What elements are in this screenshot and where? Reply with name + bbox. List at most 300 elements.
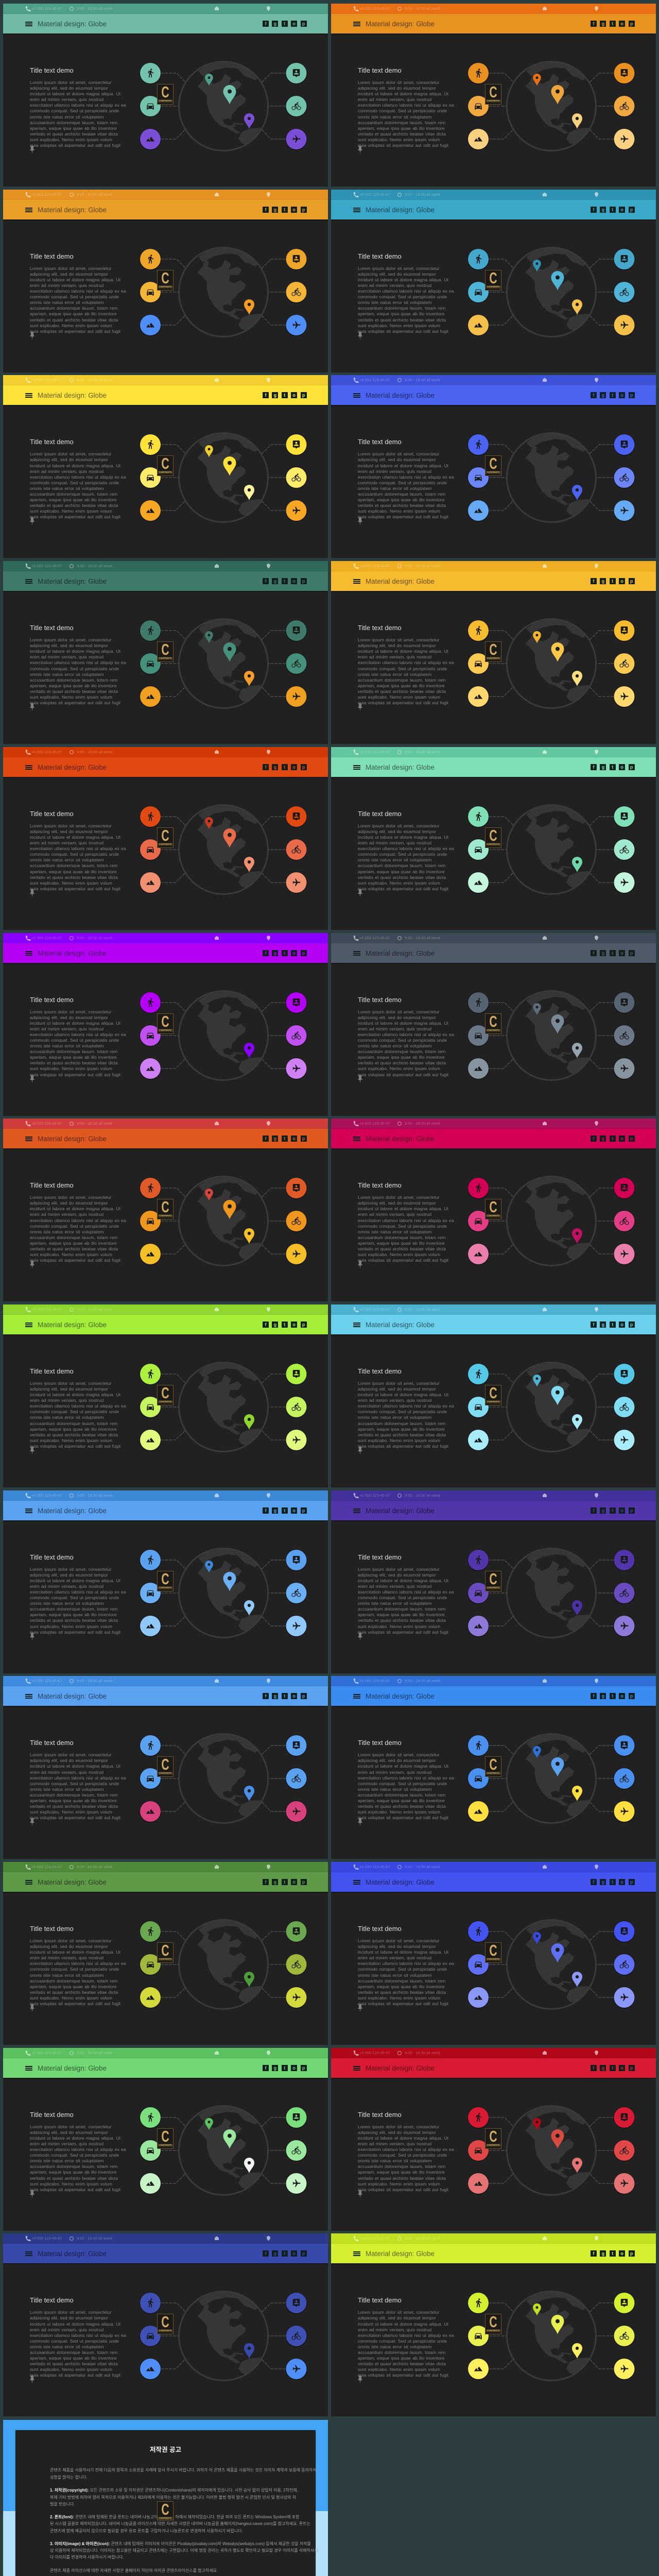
body text: veritatis et quasi archicto beatae vitae dicta: [358, 503, 446, 508]
top info bar: [3, 1118, 328, 1129]
body text: enim ad minim veniam, quis nostrud: [358, 840, 431, 845]
watermark badge: CONTENTS: [159, 99, 171, 102]
header bar: f: [265, 393, 267, 398]
header bar: t: [284, 765, 285, 770]
body text: omnis iste natus error sit voluptatem: [30, 1415, 104, 1420]
body text: sunt explicabo. Nemo enim ipsam volum: [30, 2367, 112, 2372]
panel: slide 18 deep purple: [331, 1490, 656, 1673]
closing note: 콘텐츠 제품 라이선스에 대한 자세한 사항은 홈페이지 하단의 저작권 콘텐츠라이선스를 참고하세요.: [50, 2568, 218, 2573]
top info bar: +0 000 123-45-67: [359, 1679, 390, 1683]
body text: adipiscing elit, sed do eiusmod tempor: [30, 829, 108, 834]
watermark badge: [485, 2128, 501, 2149]
body text: sunt explicabo. Nemo enim ipsam volum: [358, 2367, 440, 2372]
body text: omnis iste natus error sit voluptatem: [358, 1601, 432, 1606]
location pins: [533, 445, 582, 500]
body text: sunt explicabo. Nemo enim ipsam volum: [358, 1624, 440, 1629]
panel: slide 20 blue and yellow: [331, 1676, 656, 1859]
title: Title text demo: [358, 1367, 402, 1375]
body text: aperiam, eaque ipsa quae ab illo inventore: [358, 497, 445, 502]
body text: enim ad minim veniam, quis nostrud: [358, 2141, 431, 2146]
body text: adipiscing elit, sed do eiusmod tempor: [30, 272, 108, 277]
dashed connectors: [489, 817, 614, 883]
watermark badge: [485, 84, 501, 105]
header bar: t: [284, 1322, 285, 1327]
body text: enim ad minim veniam, quis nostrud: [358, 283, 431, 288]
notice title: 저작권 공고: [150, 2446, 181, 2453]
header bar: [331, 2058, 656, 2078]
header bar: g: [602, 1879, 604, 1885]
body text: veritatis et quasi archicto beatae vitae dicta: [30, 1618, 118, 1623]
header bar: p: [302, 21, 305, 26]
body text: exercitation ullamco laboris nisi ut aliquip ex ea: [30, 103, 126, 108]
header bar: t: [612, 1136, 613, 1141]
body text: exercitation ullamco laboris nisi ut aliquip ex ea: [358, 289, 454, 294]
header bar: o: [620, 1322, 623, 1327]
header bar: p: [302, 1693, 305, 1699]
body text: Lorem ipsum dolor sit amet, consectetur: [358, 1938, 440, 1943]
body text: veritatis et quasi archicto beatae vitae dicta: [358, 1060, 446, 1065]
header bar: o: [620, 950, 623, 955]
body text: aperiam, eaque ipsa quae ab illo inventore: [358, 2355, 445, 2361]
body text: quia voluptas sit aspernatur aut odit aut fugit: [30, 1815, 120, 1820]
header bar: f: [265, 207, 267, 212]
body text: commodo conquat. Sed ut perspiciatis unde: [30, 852, 119, 857]
header bar: p: [302, 207, 305, 212]
globe infographic: [353, 378, 635, 524]
header bar: o: [620, 21, 623, 26]
body text: sunt explicabo. Nemo enim ipsam volum: [358, 323, 440, 328]
pushpin: [358, 1075, 362, 1083]
globe infographic: [26, 564, 307, 711]
body text: [358, 1567, 454, 1635]
header bar: Material design: Globe: [38, 2064, 107, 2072]
body text: sunt explicabo. Nemo enim ipsam volum: [30, 1066, 112, 1071]
body text: commodo conquat. Sed ut perspiciatis unde: [30, 294, 119, 299]
top info bar: [3, 933, 328, 943]
body text: [30, 1752, 126, 1820]
location pins: [533, 2118, 582, 2173]
watermark badge: [485, 1013, 501, 1033]
header bar: [331, 1501, 656, 1520]
body text: adipiscing elit, sed do eiusmod tempor: [358, 457, 436, 462]
body text: Lorem ipsum dolor sit amet, consectetur: [30, 1009, 112, 1014]
globe map: [179, 1734, 268, 1823]
top info bar: 9:00 - 18:00 all week: [77, 1493, 112, 1498]
body text: incidunt ut labore et dolore magna aliqua. Ut: [358, 1950, 448, 1955]
body text: incidunt ut labore et dolore magna aliqua. Ut: [30, 1021, 120, 1026]
body text: Lorem ipsum dolor sit amet, consectetur: [358, 1009, 440, 1014]
globe infographic: [353, 564, 635, 711]
header bar: f: [265, 2065, 267, 2071]
dashed connectors: [161, 2303, 286, 2369]
body text: omnis iste natus error sit voluptatem: [358, 114, 432, 120]
body text: sunt explicabo. Nemo enim ipsam volum: [30, 1252, 112, 1257]
header bar: Material design: Globe: [366, 1321, 435, 1329]
watermark badge: [157, 1385, 174, 1405]
header bar: p: [302, 1322, 305, 1327]
body text: exercitation ullamco laboris nisi ut aliquip ex ea: [358, 1589, 454, 1595]
globe infographic: [331, 2048, 656, 2231]
body text: incidunt ut labore et dolore magna aliqua. Ut: [358, 1578, 448, 1583]
header bar: f: [593, 1508, 594, 1513]
header bar: g: [602, 1322, 604, 1327]
dashed connectors: [161, 1003, 286, 1069]
top info bar: +0 000 123-45-67: [359, 2050, 390, 2055]
header bar: g: [274, 1136, 276, 1141]
body text: exercitation ullamco laboris nisi ut aliquip ex ea: [30, 1775, 126, 1781]
title: Title text demo: [358, 2111, 402, 2119]
dashed connectors: [161, 1931, 286, 1997]
globe infographic: [26, 1307, 307, 1454]
body text: sunt explicabo. Nemo enim ipsam volum: [358, 880, 440, 886]
header bar: g: [602, 1136, 604, 1141]
location pins: [205, 1932, 254, 1987]
dashed connectors: [161, 817, 286, 883]
top info bar: [3, 747, 328, 757]
watermark badge: [157, 1013, 174, 1033]
header bar: g: [274, 1879, 276, 1885]
body text: accusantium doloremque lauum, totam rem: [358, 1235, 445, 1240]
body text: sunt explicabo. Nemo enim ipsam volum: [30, 1438, 112, 1443]
watermark badge: CONTENTS: [487, 2144, 499, 2146]
header bar: t: [284, 2065, 285, 2071]
header bar: f: [265, 2251, 267, 2256]
watermark badge: CONTENTS: [159, 2329, 171, 2332]
location pins: [205, 817, 254, 872]
header bar: o: [292, 1322, 296, 1327]
panel: slide 10 mint: [331, 747, 656, 930]
section 1 copyright: [15, 2430, 16, 2431]
title: Title text demo: [30, 2296, 74, 2304]
body text: enim ad minim veniam, quis nostrud: [358, 97, 431, 102]
body text: incidunt ut labore et dolore magna aliqua. Ut: [30, 91, 120, 96]
top info bar: +0 000 123-45-67: [31, 6, 62, 11]
globe infographic: [353, 1679, 635, 1826]
top info bar: 9:00 - 18:00 all week: [405, 1121, 440, 1126]
body text: sunt explicabo. Nemo enim ipsam volum: [358, 137, 440, 142]
body text: aperiam, eaque ipsa quae ab illo inventore: [30, 1427, 117, 1432]
header bar: g: [274, 2065, 276, 2071]
body text: commodo conquat. Sed ut perspiciatis unde: [358, 480, 447, 485]
body text: incidunt ut labore et dolore magna aliqua. Ut: [358, 277, 448, 282]
body text: Lorem ipsum dolor sit amet, consectetur: [30, 80, 112, 85]
dashed connectors: [489, 1931, 614, 1997]
body text: incidunt ut labore et dolore magna aliqua. Ut: [30, 463, 120, 468]
body text: omnis iste natus error sit voluptatem: [30, 114, 104, 120]
top info bar: +0 000 123-45-67: [359, 1493, 390, 1498]
title: Title text demo: [358, 1739, 402, 1747]
header bar: p: [302, 1879, 305, 1885]
body text: exercitation ullamco laboris nisi ut aliquip ex ea: [358, 1032, 454, 1037]
body text: Lorem ipsum dolor sit amet, consectetur: [358, 2124, 440, 2129]
header bar: o: [292, 21, 296, 26]
body text: enim ad minim veniam, quis nostrud: [30, 97, 103, 102]
body text: adipiscing elit, sed do eiusmod tempor: [358, 1944, 436, 1949]
top info bar: 9:00 - 18:00 all week: [77, 1121, 112, 1126]
watermark badge: [485, 270, 501, 291]
body text: enim ad minim veniam, quis nostrud: [358, 1584, 431, 1589]
header bar: t: [612, 1322, 613, 1327]
body text: Lorem ipsum dolor sit amet, consectetur: [30, 1567, 112, 1572]
watermark badge: CONTENTS: [159, 1400, 171, 1403]
icon circles: [140, 434, 307, 522]
header bar: p: [302, 1508, 305, 1513]
body text: sunt explicabo. Nemo enim ipsam volum: [358, 1809, 440, 1815]
body text: veritatis et quasi archicto beatae vitae dicta: [30, 2361, 118, 2366]
dashed connectors: [161, 445, 286, 511]
body text: quia voluptas sit aspernatur aut odit aut fugit: [358, 1630, 448, 1635]
header bar: p: [630, 765, 633, 770]
body text: commodo conquat. Sed ut perspiciatis unde: [30, 2153, 119, 2158]
body text: quia voluptas sit aspernatur aut odit aut fugit: [358, 2372, 448, 2378]
watermark badge: CONTENTS: [159, 285, 171, 288]
pushpin: [30, 1261, 34, 1268]
top info bar: +0 000 123-45-67: [31, 936, 62, 940]
body text: quia voluptas sit aspernatur aut odit aut fugit: [30, 700, 120, 705]
top info bar: 9:00 - 18:00 all week: [405, 2050, 440, 2055]
body text: adipiscing elit, sed do eiusmod tempor: [358, 1200, 436, 1206]
body text: accusantium doloremque lauum, totam rem: [30, 1978, 117, 1984]
location pins: [533, 1746, 582, 1801]
body text: enim ad minim veniam, quis nostrud: [30, 1398, 103, 1403]
pushpin: [30, 332, 34, 340]
body text: incidunt ut labore et dolore magna aliqua. Ut: [30, 835, 120, 840]
globe map: [507, 805, 596, 894]
watermark badge: CONTENTS: [487, 1772, 499, 1774]
header bar: g: [602, 579, 604, 584]
body text: sunt explicabo. Nemo enim ipsam volum: [358, 2181, 440, 2187]
header bar: o: [620, 393, 623, 398]
panel: slide 6 blue: [331, 375, 656, 558]
header bar: f: [265, 579, 267, 584]
top info bar: [3, 561, 328, 571]
body text: veritatis et quasi archicto beatae vitae dicta: [358, 1990, 446, 1995]
contact icons: [354, 1865, 598, 1870]
body text: aperiam, eaque ipsa quae ab illo inventore: [30, 869, 117, 874]
header bar: f: [593, 1322, 594, 1327]
header bar: t: [612, 765, 613, 770]
pushpin: [30, 517, 34, 525]
header bar: p: [630, 1879, 633, 1885]
body text: commodo conquat. Sed ut perspiciatis unde: [358, 2338, 447, 2344]
globe infographic: [353, 6, 635, 154]
body text: adipiscing elit, sed do eiusmod tempor: [30, 2130, 108, 2135]
header bar: Material design: Globe: [366, 1135, 435, 1143]
body text: [30, 823, 126, 891]
globe map: [507, 1548, 596, 1637]
header bar: Material design: Globe: [366, 949, 435, 957]
body text: aperiam, eaque ipsa quae ab illo inventore: [358, 869, 445, 874]
dashed connectors: [489, 2117, 614, 2183]
header bar: [3, 1129, 328, 1148]
body text: [358, 451, 454, 519]
header bar: [331, 1686, 656, 1706]
header bar: Material design: Globe: [366, 1507, 435, 1515]
body text: aperiam, eaque ipsa quae ab illo inventore: [30, 1612, 117, 1617]
location pins: [533, 1375, 582, 1430]
body text: exercitation ullamco laboris nisi ut aliquip ex ea: [358, 660, 454, 665]
section 2 font: [15, 2430, 16, 2431]
watermark badge: CONTENTS: [487, 1028, 499, 1031]
pushpin: [30, 1818, 34, 1826]
body text: veritatis et quasi archicto beatae vitae dicta: [30, 689, 118, 694]
watermark badge: [485, 641, 501, 662]
header bar: [331, 385, 656, 405]
body text: accusantium doloremque lauum, totam rem: [358, 2164, 445, 2169]
title: Title text demo: [358, 438, 402, 446]
location pins: [533, 1932, 582, 1987]
location pins: [205, 1003, 254, 1058]
top info bar: +0 000 123-45-67: [359, 1307, 390, 1312]
contact icons: [26, 6, 270, 11]
body text: enim ad minim veniam, quis nostrud: [358, 1212, 431, 1217]
body text: adipiscing elit, sed do eiusmod tempor: [30, 457, 108, 462]
body text: commodo conquat. Sed ut perspiciatis unde: [30, 1781, 119, 1786]
top info bar: [3, 2233, 328, 2244]
header bar: f: [265, 21, 267, 26]
body text: commodo conquat. Sed ut perspiciatis unde: [30, 1224, 119, 1229]
top info bar: [331, 933, 656, 943]
body text: aperiam, eaque ipsa quae ab illo inventore: [358, 683, 445, 688]
icon circles: [140, 1363, 307, 1451]
top info bar: +0 000 123-45-67: [31, 1679, 62, 1683]
icon circles: [467, 1735, 635, 1823]
watermark badge: CONTENTS: [159, 1586, 171, 1589]
watermark badge: CONTENTS: [487, 2329, 499, 2332]
contact icons: [26, 1307, 270, 1312]
body text: incidunt ut labore et dolore magna aliqua. Ut: [30, 1392, 120, 1397]
body text: quia voluptas sit aspernatur aut odit aut fugit: [30, 1444, 120, 1449]
header bar: t: [284, 207, 285, 212]
body text: [358, 266, 454, 334]
body text: commodo conquat. Sed ut perspiciatis unde: [30, 1409, 119, 1414]
body text: exercitation ullamco laboris nisi ut aliquip ex ea: [358, 1775, 454, 1781]
panel: slide 21 olive green: [3, 1862, 328, 2045]
top info bar: [331, 1490, 656, 1501]
globe infographic: [26, 1121, 307, 1268]
header bar: o: [620, 1879, 623, 1885]
body text: commodo conquat. Sed ut perspiciatis unde: [30, 1038, 119, 1043]
body text: omnis iste natus error sit voluptatem: [30, 1973, 104, 1978]
body text: incidunt ut labore et dolore magna aliqua. Ut: [30, 1206, 120, 1211]
body text: [30, 1938, 126, 2007]
globe map: [179, 805, 268, 894]
body text: accusantium doloremque lauum, totam rem: [30, 677, 117, 683]
body text: enim ad minim veniam, quis nostrud: [30, 1212, 103, 1217]
globe infographic: [353, 936, 635, 1083]
header bar: Material design: Globe: [38, 206, 107, 214]
header bar: o: [620, 765, 623, 770]
watermark badge: CONTENTS: [487, 843, 499, 845]
globe infographic: [353, 750, 635, 896]
body text: Lorem ipsum dolor sit amet, consectetur: [358, 451, 440, 456]
icon circles: [140, 248, 307, 336]
header bar: Material design: Globe: [38, 2250, 107, 2258]
body text: quia voluptas sit aspernatur aut odit aut fugit: [358, 2001, 448, 2006]
body text: Lorem ipsum dolor sit amet, consectetur: [30, 1381, 112, 1386]
dashed connectors: [489, 1374, 614, 1440]
top info bar: +0 000 123-45-67: [359, 936, 390, 940]
watermark badge: CONTENTS: [159, 2517, 171, 2519]
header bar: g: [602, 2251, 604, 2256]
header bar: o: [620, 2065, 623, 2071]
header bar: [3, 1315, 328, 1334]
header bar: Material design: Globe: [38, 1321, 107, 1329]
pushpin: [358, 1447, 362, 1454]
top info bar: +0 000 123-45-67: [31, 192, 62, 197]
header bar: Material design: Globe: [38, 949, 107, 957]
body text: [358, 80, 454, 148]
pushpin: [358, 2190, 362, 2198]
body text: aperiam, eaque ipsa quae ab illo inventore: [30, 1241, 117, 1246]
header bar: f: [265, 1508, 267, 1513]
body text: Lorem ipsum dolor sit amet, consectetur: [358, 2310, 440, 2315]
title: Title text demo: [30, 1553, 74, 1561]
body text: exercitation ullamco laboris nisi ut aliquip ex ea: [30, 2147, 126, 2152]
icon circles: [467, 2293, 635, 2380]
top info bar: [3, 1304, 328, 1315]
icon circles: [140, 620, 307, 708]
body text: omnis iste natus error sit voluptatem: [358, 2344, 432, 2349]
header bar: p: [302, 950, 305, 955]
header bar: t: [284, 393, 285, 398]
watermark badge: CONTENTS: [487, 99, 499, 102]
globe map: [507, 247, 596, 336]
watermark badge: CONTENTS: [159, 1214, 171, 1217]
header bar: Material design: Globe: [366, 2064, 435, 2072]
body text: exercitation ullamco laboris nisi ut aliquip ex ea: [30, 289, 126, 294]
body text: incidunt ut labore et dolore magna aliqua. Ut: [30, 649, 120, 654]
body text: Lorem ipsum dolor sit amet, consectetur: [30, 823, 112, 828]
panel: slide 19 blue and pink: [3, 1676, 328, 1859]
body text: adipiscing elit, sed do eiusmod tempor: [30, 86, 108, 91]
body text: quia voluptas sit aspernatur aut odit aut fugit: [30, 2187, 120, 2192]
body text: [30, 1381, 126, 1449]
body text: enim ad minim veniam, quis nostrud: [358, 1770, 431, 1775]
watermark badge: CONTENTS: [159, 2144, 171, 2146]
body text: enim ad minim veniam, quis nostrud: [358, 654, 431, 659]
body text: quia voluptas sit aspernatur aut odit aut fugit: [358, 1258, 448, 1263]
title: Title text demo: [358, 1181, 402, 1189]
body text: incidunt ut labore et dolore magna aliqua. Ut: [358, 835, 448, 840]
globe infographic: [26, 1679, 307, 1826]
top info bar: +0 000 123-45-67: [31, 1307, 62, 1312]
body text: Lorem ipsum dolor sit amet, consectetur: [358, 823, 440, 828]
title: Title text demo: [30, 1367, 74, 1375]
header bar: Material design: Globe: [38, 20, 107, 28]
title: Title text demo: [30, 624, 74, 632]
globe map: [507, 1734, 596, 1823]
title: Title text demo: [358, 624, 402, 632]
body text: commodo conquat. Sed ut perspiciatis unde: [30, 480, 119, 485]
header bar: g: [602, 1693, 604, 1699]
header bar: g: [602, 950, 604, 955]
header bar: f: [593, 393, 594, 398]
body text: veritatis et quasi archicto beatae vitae dicta: [358, 689, 446, 694]
dashed connectors: [489, 1560, 614, 1626]
notice card: 벌을 받습니다.: [50, 2502, 75, 2506]
body text: quia voluptas sit aspernatur aut odit aut fugit: [358, 1444, 448, 1449]
globe map: [179, 1177, 268, 1266]
globe infographic: [26, 1493, 307, 1640]
header bar: o: [292, 1136, 296, 1141]
header bar: [3, 200, 328, 219]
panel: slide 5 yellow: [3, 375, 328, 558]
top info bar: [331, 2233, 656, 2244]
watermark badge: [485, 455, 501, 476]
body text: quia voluptas sit aspernatur aut odit aut fugit: [30, 1630, 120, 1635]
globe infographic: [353, 1307, 635, 1454]
